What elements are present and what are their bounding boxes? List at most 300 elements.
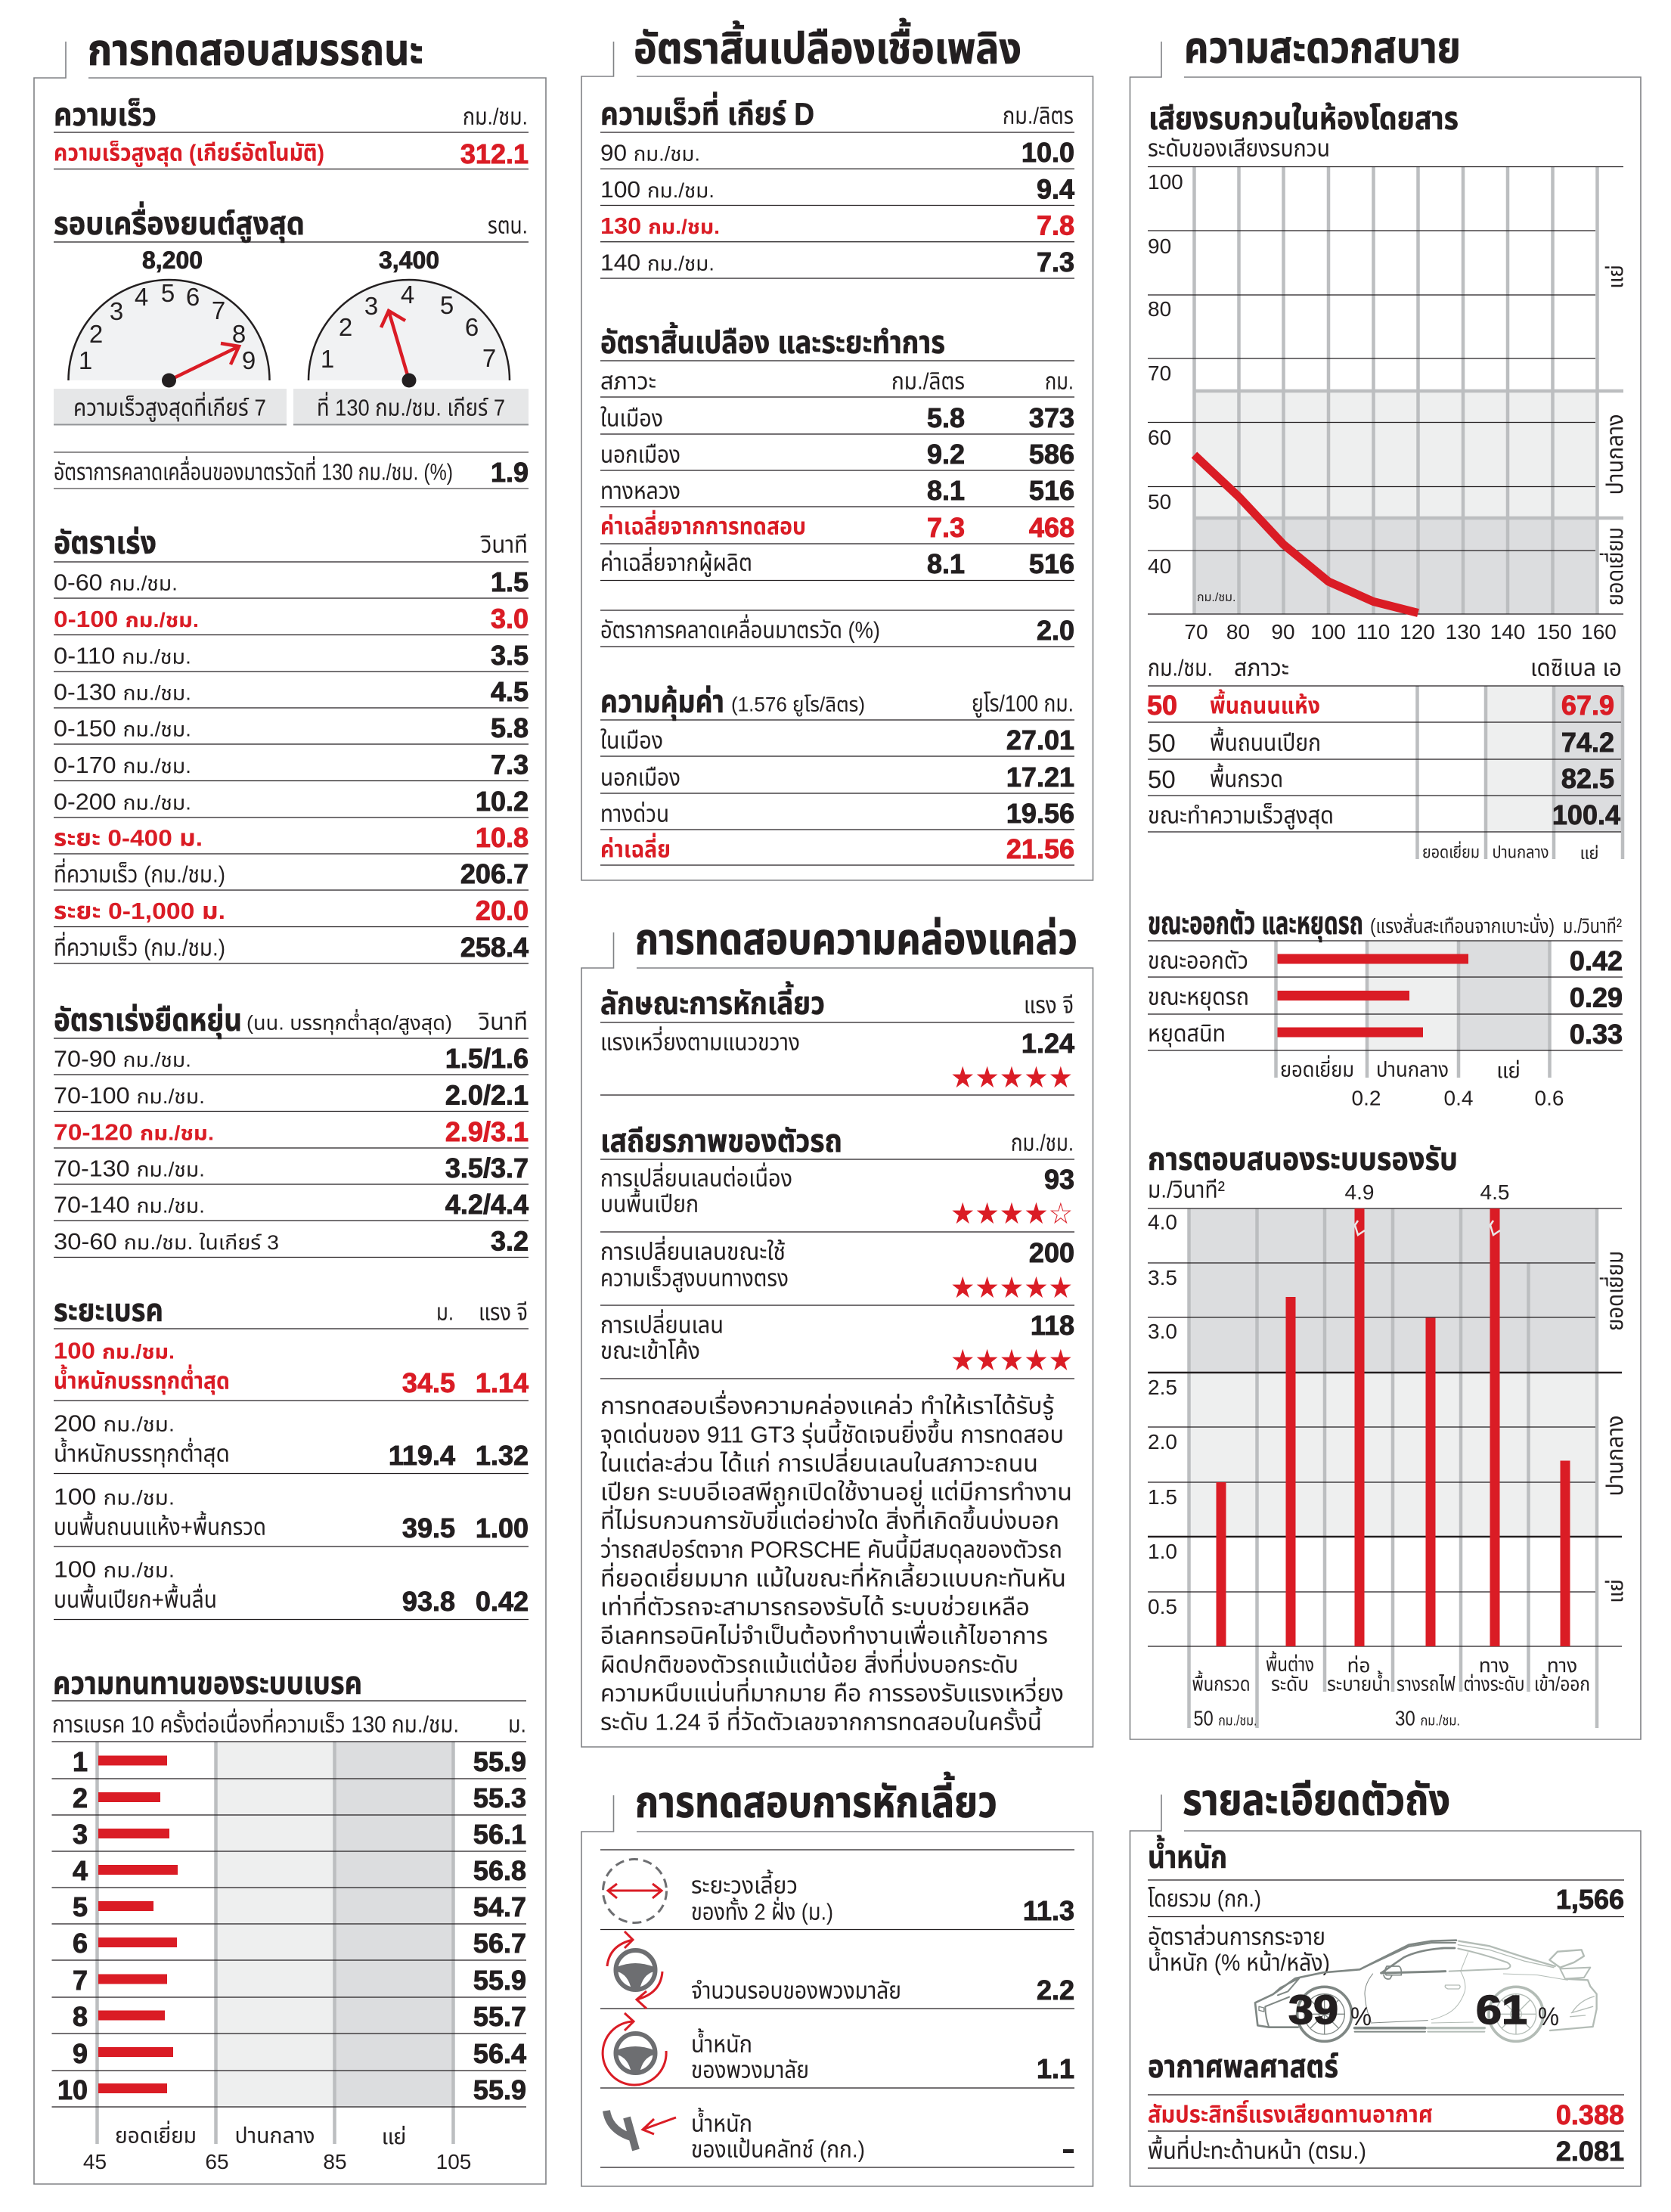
chart: interior noise: 90	[1148, 234, 1171, 258]
brake run numbers	[57, 1746, 88, 2105]
table: acceleration: อัตราเร่ง	[54, 525, 157, 560]
row: speedometer deviation: 2.0	[1037, 615, 1074, 646]
section: aerodynamics: พื้นที่ปะทะด้านหน้า (ตรม.)	[1148, 2134, 1366, 2164]
section: cornering behaviour: ★★★★★	[950, 1061, 1073, 1095]
chart: interior noise	[1148, 101, 1628, 644]
table: noise levels: ยอดเยี่ยม	[1422, 841, 1480, 862]
chart: interior noise: 150	[1536, 620, 1572, 644]
chart: interior noise: 110	[1356, 620, 1390, 644]
table: consumption and range: 5.8	[927, 402, 965, 433]
brake fade axis: 105	[436, 2150, 471, 2173]
table: noise levels: 50	[1148, 729, 1176, 757]
table: consumption in gear D: 9.4	[1037, 174, 1074, 204]
table: braking distance: 100 กม./ชม.	[54, 1337, 175, 1364]
chart: seat vibration on launch and braking	[1148, 905, 1623, 1110]
gauge: 3,400 rpm: 7	[482, 344, 496, 372]
brake fade axis: 85	[323, 2150, 347, 2173]
weight distribution: rear: 61	[1476, 1987, 1527, 2033]
brake run numbers: 1	[73, 1746, 88, 1777]
text block: agility commentary: เปียก ระบบอีเอสพีถูกเปิดใช้งานอยู่ แต่มีการทำงาน	[600, 1479, 1072, 1506]
table: acceleration: วินาที	[481, 531, 528, 558]
chart: suspension response: 2.5	[1148, 1376, 1177, 1399]
panel: agility test	[581, 915, 1093, 1747]
chart: seat vibration on launch and braking: 0.42	[1570, 945, 1623, 976]
table: consumption in gear D: ความเร็วที่ เกียร์ D	[600, 92, 814, 132]
section: top speed	[54, 97, 529, 169]
table: acceleration: 10.2	[476, 786, 529, 817]
brake fade axis: ยอดเยี่ยม	[115, 2120, 197, 2148]
chart: interior noise: 60	[1148, 426, 1171, 449]
gauge caption: at top speed	[54, 389, 287, 425]
chart: suspension response: ท่อ	[1347, 1654, 1370, 1677]
brake fade bars	[98, 1756, 178, 2093]
chart: suspension response: ปานกลาง	[1603, 1416, 1628, 1496]
table: flexibility: 70-140 กม./ชม.	[54, 1192, 205, 1218]
section: cornering behaviour: แรง จี	[1024, 992, 1074, 1018]
chart: suspension response: พื้นต่าง	[1266, 1650, 1314, 1676]
table: noise levels: 74.2	[1561, 727, 1614, 758]
table: consumption and range: นอกเมือง	[600, 442, 680, 467]
row: turning circle: ของทั้ง 2 ฝั่ง (ม.)	[691, 1897, 833, 1925]
table: consumption and range: 516	[1029, 475, 1074, 506]
table: braking distance: 119.4	[389, 1440, 455, 1471]
title: fuel consumption: อัตราสิ้นเปลืองเชื้อเพลิง	[634, 17, 1022, 73]
chart: interior noise: 80	[1226, 620, 1250, 644]
chart: brake fade	[51, 1665, 526, 2173]
table: braking distance: 1.00	[476, 1512, 529, 1543]
chart: suspension response: 3.0	[1148, 1320, 1177, 1343]
gauge: 8,200 rpm: 9	[242, 346, 256, 374]
table: acceleration: 4.5	[491, 676, 529, 707]
table: acceleration: 0-60 กม./ชม.	[54, 569, 178, 596]
chart: brake fade: การเบรค 10 ครั้งต่อเนื่องที่ความเร็ว 130 กม./ชม.	[52, 1708, 459, 1738]
gauge caption: at 130 km/h: ที่ 130 กม./ชม. เกียร์ 7	[317, 392, 505, 420]
chart: interior noise: ระดับของเสียงรบกวน	[1148, 135, 1330, 162]
section: maximum engine speed	[54, 201, 529, 425]
section: weight: โดยรวม (กก.)	[1148, 1885, 1261, 1912]
table: braking distance: 1.32	[476, 1440, 529, 1471]
brake distance values: 54.7	[473, 1891, 526, 1922]
text block: agility commentary: ระดับ 1.24 จี ที่วัดตัวเลขจากการทดสอบในครั้งนี้	[600, 1706, 1042, 1735]
table: consumption and range: อัตราสิ้นเปลือง และระยะทำการ	[600, 321, 945, 360]
section: vehicle stability: ความเร็วสูงบนทางตรง	[600, 1264, 789, 1292]
table: running cost: (1.576 ยูโร/ลิตร)	[731, 693, 865, 717]
table: running cost: นอกเมือง	[600, 764, 680, 791]
section: cornering behaviour: 1.24	[1022, 1028, 1074, 1059]
gauge: 8,200 rpm: 3	[110, 297, 123, 325]
section: weight	[1148, 1835, 1624, 1975]
section: vehicle stability: บนพื้นเปียก	[600, 1187, 699, 1218]
table: consumption in gear D: 7.8	[1037, 210, 1074, 240]
table: consumption in gear D: 130 กม./ชม.	[600, 213, 720, 239]
row: turning circle	[691, 1869, 1074, 1926]
table: running cost: ทางด่วน	[600, 800, 669, 827]
chart: seat vibration on launch and braking: ขณะออกตัว	[1148, 947, 1248, 974]
section: cornering behaviour: แรงเหวี่ยงตามแนวขวาง	[600, 1025, 800, 1056]
panel: performance test	[34, 26, 546, 2184]
chart: suspension response: 1.5	[1148, 1485, 1177, 1509]
chart: suspension response: การตอบสนองระบบรองรับ	[1148, 1141, 1458, 1177]
table: consumption and range: 8.1	[927, 548, 965, 579]
table: acceleration: 0-170 กม./ชม.	[54, 752, 191, 778]
table: running cost: ในเมือง	[600, 728, 663, 753]
table: running cost: 19.56	[1006, 798, 1074, 829]
row: steering wheel turns: จำนวนรอบของพวงมาลัย	[691, 1977, 901, 2004]
table: braking distance: ม.	[436, 1299, 454, 1325]
section: weight: น้ำหนัก	[1148, 1835, 1227, 1875]
table: acceleration: ระยะ 0-400 ม.	[54, 824, 203, 852]
row: clutch weight: ของแป้นคลัทช์ (กก.)	[691, 2136, 865, 2163]
section: vehicle stability: ★★★★★	[950, 1344, 1073, 1378]
table: consumption and range: 373	[1029, 402, 1074, 433]
text block: agility commentary	[600, 1390, 1072, 1735]
table: running cost: ค่าเฉลี่ย	[600, 832, 671, 862]
section: maximum engine speed: รอบเครื่องยนต์สูงสุด	[54, 201, 305, 243]
chart: suspension response: ม./วินาที²	[1148, 1177, 1225, 1202]
table: braking distance: บนพื้นเปียก+พื้นลื่น	[54, 1584, 217, 1612]
brake distance values: 55.9	[473, 2074, 526, 2105]
chart: suspension response: 4.0	[1148, 1210, 1177, 1234]
row: speedometer deviation	[600, 610, 1074, 647]
icon: clutch pedal	[606, 2111, 676, 2150]
chart: seat vibration on launch and braking: ขณะหยุดรถ	[1148, 983, 1249, 1010]
brake fade axis	[83, 2120, 471, 2173]
table: flexibility: 70-130 กม./ชม.	[54, 1156, 205, 1181]
gauge: 3,400 rpm: 4	[401, 281, 414, 309]
weight distribution: front: %	[1350, 2003, 1372, 2031]
table: braking distance: 1.14	[476, 1367, 529, 1398]
chart: interior noise: ปานกลาง	[1603, 414, 1628, 495]
table: noise levels: 82.5	[1561, 763, 1614, 794]
chart: seat vibration on launch and braking: ขณะออกตัว และหยุดรถ	[1148, 905, 1363, 942]
table: flexibility: 2.0/2.1	[445, 1080, 529, 1110]
brake distance values: 55.9	[473, 1746, 526, 1777]
table: braking distance: น้ำหนักบรรทุกต่ำสุด	[54, 1364, 230, 1395]
chart: seat vibration on launch and braking: 0.29	[1570, 982, 1623, 1013]
section: aerodynamics	[1148, 2049, 1624, 2168]
text block: agility commentary: ความหนึบแน่นที่มากมาย คือ การรองรับแรงเหวี่ยง	[600, 1677, 1064, 1706]
chart: seat vibration on launch and braking: ปานกลาง	[1376, 1057, 1449, 1081]
brake distance values: 56.4	[473, 2038, 526, 2069]
chart: suspension response: พื้นกรวด	[1192, 1670, 1251, 1695]
row: speedometer deviation: อัตราการคลาดเคลื่อนของมาตรวัดที่ 130 กม./ชม. (%)	[54, 455, 453, 486]
chart: suspension response: ทาง	[1479, 1654, 1509, 1677]
table: consumption and range: 8.1	[927, 475, 965, 506]
text block: agility commentary: จุดเด่นของ 911 GT3 รุ่นนี้ชัดเจนยิ่งขึ้น การทดสอบ	[600, 1419, 1064, 1449]
weight distribution: rear	[1476, 1987, 1559, 2033]
table: flexibility	[54, 1002, 529, 1257]
chart: interior noise: 120	[1400, 620, 1435, 644]
table: acceleration: 0-110 กม./ชม.	[54, 643, 191, 669]
section: weight: อัตราส่วนการกระจาย	[1148, 1924, 1325, 1950]
table: consumption and range: สภาวะ	[600, 368, 656, 395]
table: running cost	[600, 684, 1074, 865]
chart: interior noise: 50	[1148, 490, 1171, 513]
gauge: 8,200 rpm: 8,200	[142, 247, 203, 274]
table: consumption and range: ทางหลวง	[600, 478, 680, 504]
table: acceleration: 0-150 กม./ชม.	[54, 715, 191, 741]
section: top speed: ความเร็ว	[54, 97, 157, 132]
table: acceleration: 206.7	[460, 858, 529, 889]
gauge: 3,400 rpm: 3	[364, 292, 378, 320]
brake run numbers: 7	[73, 1965, 88, 1996]
chart: seat vibration on launch and braking: ม./วินาที²	[1563, 915, 1622, 938]
row: turning circle: 11.3	[1023, 1895, 1074, 1926]
table: noise levels	[1147, 655, 1623, 863]
brake run numbers: 6	[73, 1928, 88, 1959]
table: consumption and range: 9.2	[927, 439, 965, 470]
text block: agility commentary: ผิดปกติของตัวรถแม้แต่น้อย สิ่งที่บ่งบอกระดับ	[600, 1649, 1018, 1677]
title: body details: รายละเอียดตัวถัง	[1183, 1776, 1450, 1825]
chart: suspension response: ระบายน้ำ	[1327, 1670, 1390, 1695]
table: noise levels: แย่	[1580, 844, 1598, 863]
chart: suspension response: 3.5	[1148, 1266, 1177, 1289]
weight distribution: rear: %	[1538, 2003, 1559, 2031]
table: flexibility: 70-100 กม./ชม.	[54, 1082, 205, 1109]
chart: suspension response: 4.9	[1345, 1180, 1374, 1204]
title: comfort: ความสะดวกสบาย	[1184, 23, 1461, 73]
table: noise levels: ขณะทำความเร็วสูงสุด	[1148, 802, 1334, 829]
table: flexibility: 70-90 กม./ชม.	[54, 1045, 191, 1072]
chart: suspension response: 30 กม./ชม.	[1395, 1706, 1460, 1730]
chart: interior noise: 70	[1148, 361, 1171, 385]
chart: interior noise: แย่	[1604, 265, 1627, 289]
table: acceleration: 0-200 กม./ชม.	[54, 788, 191, 815]
table: braking distance: 34.5	[402, 1367, 455, 1398]
brake distance values: 56.7	[473, 1928, 526, 1959]
gauge: 8,200 rpm: 5	[161, 279, 175, 307]
gauge: 8,200 rpm: 7	[212, 296, 225, 324]
brake fade axis: แย่	[382, 2125, 406, 2149]
section: aerodynamics: 2.081	[1556, 2136, 1624, 2167]
table: flexibility: 3.5/3.7	[445, 1153, 529, 1184]
table: consumption and range: 468	[1029, 512, 1074, 543]
section: cornering behaviour	[600, 981, 1074, 1095]
chart: seat vibration on launch and braking: 0.33	[1570, 1019, 1623, 1050]
table: running cost: 27.01	[1006, 724, 1074, 755]
table: flexibility: 4.2/4.4	[445, 1189, 529, 1220]
text block: agility commentary: ในแต่ละส่วน ได้แก่ การเปลี่ยนเลนในสภาวะถนน	[600, 1447, 1038, 1476]
chart: seat vibration on launch and braking: 0.4	[1444, 1086, 1473, 1110]
brake distance values: 55.7	[473, 2001, 526, 2032]
gauge: 3,400 rpm: 3,400	[379, 247, 439, 274]
table: flexibility: (นน. บรรทุกต่ำสุด/สูงสุด)	[246, 1009, 452, 1035]
chart: interior noise: 100	[1310, 620, 1346, 644]
gauge: 8,200 rpm: 1	[79, 346, 92, 374]
section: vehicle stability: การเปลี่ยนเลนต่อเนื่อง	[600, 1162, 792, 1192]
table: consumption and range: กม./ลิตร	[891, 368, 965, 395]
brake fade axis: 65	[205, 2150, 229, 2173]
chart: suspension response: แย่	[1604, 1579, 1627, 1603]
table: flexibility: 30-60 กม./ชม. ในเกียร์ 3	[54, 1228, 279, 1255]
row: steering wheel turns: 2.2	[1037, 1975, 1074, 2006]
table: acceleration: 10.8	[476, 822, 529, 853]
section: vehicle stability: ★★★★★	[950, 1271, 1073, 1305]
table: flexibility: 3.2	[491, 1225, 529, 1257]
table: consumption and range: ค่าเฉลี่ยจากการทดสอบ	[600, 509, 806, 540]
table: braking distance: ระยะเบรค	[54, 1292, 163, 1328]
table: consumption in gear D: 10.0	[1022, 137, 1074, 168]
gauge caption: at 130 km/h	[293, 389, 529, 425]
chart: suspension response: ยอดเยี่ยม	[1599, 1251, 1628, 1331]
table: acceleration: ที่ความเร็ว (กม./ชม.)	[54, 932, 225, 960]
text block: agility commentary: ว่ารถสปอร์ตจาก PORSCHE คันนี้มีสมดุลของตัวรถ	[600, 1534, 1062, 1564]
weight distribution: front: 39	[1288, 1987, 1338, 2033]
gauge: 3,400 rpm: 1	[321, 345, 334, 373]
table: consumption and range: ในเมือง	[600, 405, 663, 431]
icon: turning circle	[603, 1859, 667, 1922]
panel: comfort	[1130, 23, 1641, 1739]
brake run numbers: 4	[73, 1855, 88, 1886]
chart: suspension response: 0.5	[1148, 1595, 1177, 1618]
table: flexibility: วินาที	[479, 1009, 528, 1035]
brake run numbers: 8	[73, 2001, 88, 2032]
table: flexibility: 70-120 กม./ชม.	[54, 1119, 214, 1145]
chart: interior noise: เสียงรบกวนในห้องโดยสาร	[1149, 101, 1459, 136]
table: consumption and range: กม.	[1045, 368, 1074, 395]
table: acceleration: 7.3	[491, 749, 529, 780]
table: running cost: 21.56	[1006, 833, 1074, 864]
section: top speed: ความเร็วสูงสุด (เกียร์อัตโนมัติ)	[54, 139, 324, 166]
table: consumption in gear D: กม./ลิตร	[1003, 103, 1074, 129]
table: noise levels: กม./ชม.	[1148, 655, 1213, 681]
section: aerodynamics: 0.388	[1556, 2099, 1624, 2130]
chart: suspension response: 2.0	[1148, 1430, 1177, 1453]
chart: interior noise: 90	[1271, 620, 1295, 644]
table: noise levels: พื้นถนนเปียก	[1210, 726, 1321, 756]
section: aerodynamics: อากาศพลศาสตร์	[1148, 2049, 1338, 2084]
table: acceleration: 3.5	[491, 640, 529, 671]
icon: steering effort	[603, 2013, 666, 2085]
table: braking distance: 93.8	[402, 1586, 455, 1617]
gauge: 3,400 rpm: 2	[339, 313, 352, 341]
section: vehicle stability: 93	[1044, 1164, 1074, 1195]
chart: seat vibration on launch and braking: 0.2	[1352, 1086, 1381, 1110]
chart: suspension response: รางรถไฟ	[1397, 1673, 1456, 1695]
section: maximum engine speed: รตน.	[488, 212, 528, 239]
title: agility: การทดสอบความคล่องแคล่ว	[635, 915, 1077, 964]
brake fade axis: 45	[83, 2150, 107, 2173]
chart: interior noise: 140	[1490, 620, 1525, 644]
table: noise levels: ปานกลาง	[1493, 842, 1549, 862]
table: consumption in gear D: 7.3	[1037, 247, 1074, 278]
gauge: 3,400 rpm: 5	[440, 291, 454, 319]
table: consumption and range: 7.3	[927, 512, 965, 543]
chart: suspension response	[1148, 1141, 1628, 1730]
table: braking distance: น้ำหนักบรรทุกต่ำสุด	[54, 1437, 230, 1467]
table: acceleration: 20.0	[476, 895, 529, 926]
gauge: 8,200 rpm	[68, 247, 269, 387]
brake fade axis: ปานกลาง	[234, 2124, 315, 2148]
table: acceleration: 0-100 กม./ชม.	[54, 606, 199, 632]
weight distribution: front	[1288, 1987, 1372, 2033]
brake run numbers: 2	[73, 1782, 88, 1813]
table: noise levels: 50	[1147, 690, 1177, 721]
chart: interior noise: 80	[1148, 297, 1171, 321]
table: running cost: ยูโร/100 กม.	[972, 690, 1074, 717]
illustration: sports car side view	[1255, 1941, 1597, 2041]
table: braking distance: 200 กม./ชม.	[54, 1410, 175, 1437]
table: acceleration: 1.5	[491, 566, 529, 597]
table: braking distance	[54, 1292, 529, 1620]
table: braking distance: 100 กม./ชม.	[54, 1556, 175, 1582]
chart: suspension response: ทาง	[1547, 1654, 1577, 1677]
table: acceleration: 5.8	[491, 712, 529, 743]
section: vehicle stability: การเปลี่ยนเลนขณะใช้	[600, 1236, 786, 1264]
table: noise levels: 67.9	[1561, 690, 1614, 721]
chart: interior noise: 40	[1148, 554, 1171, 578]
table: braking distance: บนพื้นถนนแห้ง+พื้นกรวด	[54, 1511, 266, 1540]
chart: suspension response: ต่างระดับ	[1464, 1673, 1524, 1695]
chart: brake fade: ความทนทานของระบบเบรค	[53, 1665, 362, 1701]
section: vehicle stability	[600, 1123, 1074, 1379]
row: steering wheel turns	[691, 1975, 1074, 2006]
brake distance values: 55.9	[473, 1965, 526, 1996]
table: consumption and range: 586	[1029, 439, 1074, 470]
section: vehicle stability: กม./ชม.	[1011, 1130, 1074, 1156]
chart: interior noise: 70	[1184, 620, 1208, 644]
chart: suspension response: 4.5	[1480, 1180, 1509, 1204]
table: acceleration: 0-130 กม./ชม.	[54, 679, 191, 705]
chart: brake fade: ม.	[508, 1711, 526, 1738]
row: clutch weight	[691, 2107, 1074, 2163]
chart: seat vibration on launch and braking: 0.6	[1535, 1086, 1564, 1110]
chart: suspension response: ระดับ	[1271, 1673, 1309, 1695]
table: flexibility: 1.5/1.6	[445, 1043, 529, 1074]
brake run numbers: 5	[73, 1891, 88, 1922]
section: weight: น้ำหนัก (% หน้า/หลัง)	[1148, 1947, 1330, 1975]
gauge: 8,200 rpm: 2	[89, 320, 103, 348]
chart: suspension response: เข้า/ออก	[1534, 1673, 1590, 1695]
table: noise levels: พื้นกรวด	[1210, 762, 1283, 793]
row: speedometer deviation: อัตราการคลาดเคลื่อนมาตรวัด (%)	[600, 614, 880, 643]
brake distance values: 55.3	[473, 1782, 526, 1813]
table: flexibility: 2.9/3.1	[445, 1116, 529, 1147]
title: steering: การทดสอบการหักเลี้ยว	[635, 1771, 997, 1827]
gauge: 3,400 rpm	[308, 247, 510, 387]
chart: suspension response: 50 กม./ชม.	[1193, 1706, 1257, 1730]
section: weight: 1,566	[1556, 1884, 1624, 1915]
text block: agility commentary: การทดสอบเรื่องความคล่องแคล่ว ทำให้เราได้รับรู้	[600, 1390, 1055, 1420]
gauge: 8,200 rpm: 6	[186, 283, 200, 311]
table: noise levels: สภาวะ	[1234, 655, 1289, 681]
section: vehicle stability: การเปลี่ยนเลน	[600, 1308, 724, 1339]
brake distance values	[473, 1746, 526, 2105]
table: braking distance: แรง จี	[479, 1299, 528, 1325]
table: running cost: 17.21	[1006, 762, 1074, 793]
row: clutch weight: น้ำหนัก	[691, 2107, 752, 2137]
table: acceleration: ระยะ 0-1,000 ม.	[54, 898, 225, 924]
chart: interior noise: กม./ชม.	[1197, 591, 1235, 604]
panel: body details	[1130, 1776, 1641, 2186]
table: consumption and range: ค่าเฉลี่ยจากผู้ผลิต	[600, 546, 752, 576]
row: steering weight: น้ำหนัก	[691, 2028, 752, 2057]
chart: seat vibration on launch and braking: หยุดสนิท	[1148, 1020, 1226, 1047]
chart: seat vibration on launch and braking: ยอดเยี่ยม	[1280, 1054, 1354, 1081]
table: acceleration	[54, 525, 529, 963]
gauge caption: at top speed: ความเร็วสูงสุดที่เกียร์ 7	[73, 392, 266, 422]
table: consumption in gear D: 140 กม./ชม.	[600, 250, 715, 275]
table: consumption and range	[600, 321, 1074, 581]
table: noise levels: 50	[1148, 765, 1176, 793]
chart: seat vibration on launch and braking: (แรงสั่นสะเทือนจากเบาะนั่ง)	[1370, 913, 1555, 938]
section: vehicle stability: 200	[1029, 1237, 1074, 1268]
suspension bars	[1216, 1208, 1570, 1646]
table: consumption in gear D: 90 กม./ชม.	[600, 139, 700, 166]
table: consumption in gear D: 100 กม./ชม.	[600, 176, 715, 203]
text block: agility commentary: อีเลคทรอนิคไม่จำเป็นต้องทำงานเพื่อแก้ไขอาการ	[600, 1620, 1048, 1649]
brake run numbers: 3	[73, 1819, 88, 1850]
